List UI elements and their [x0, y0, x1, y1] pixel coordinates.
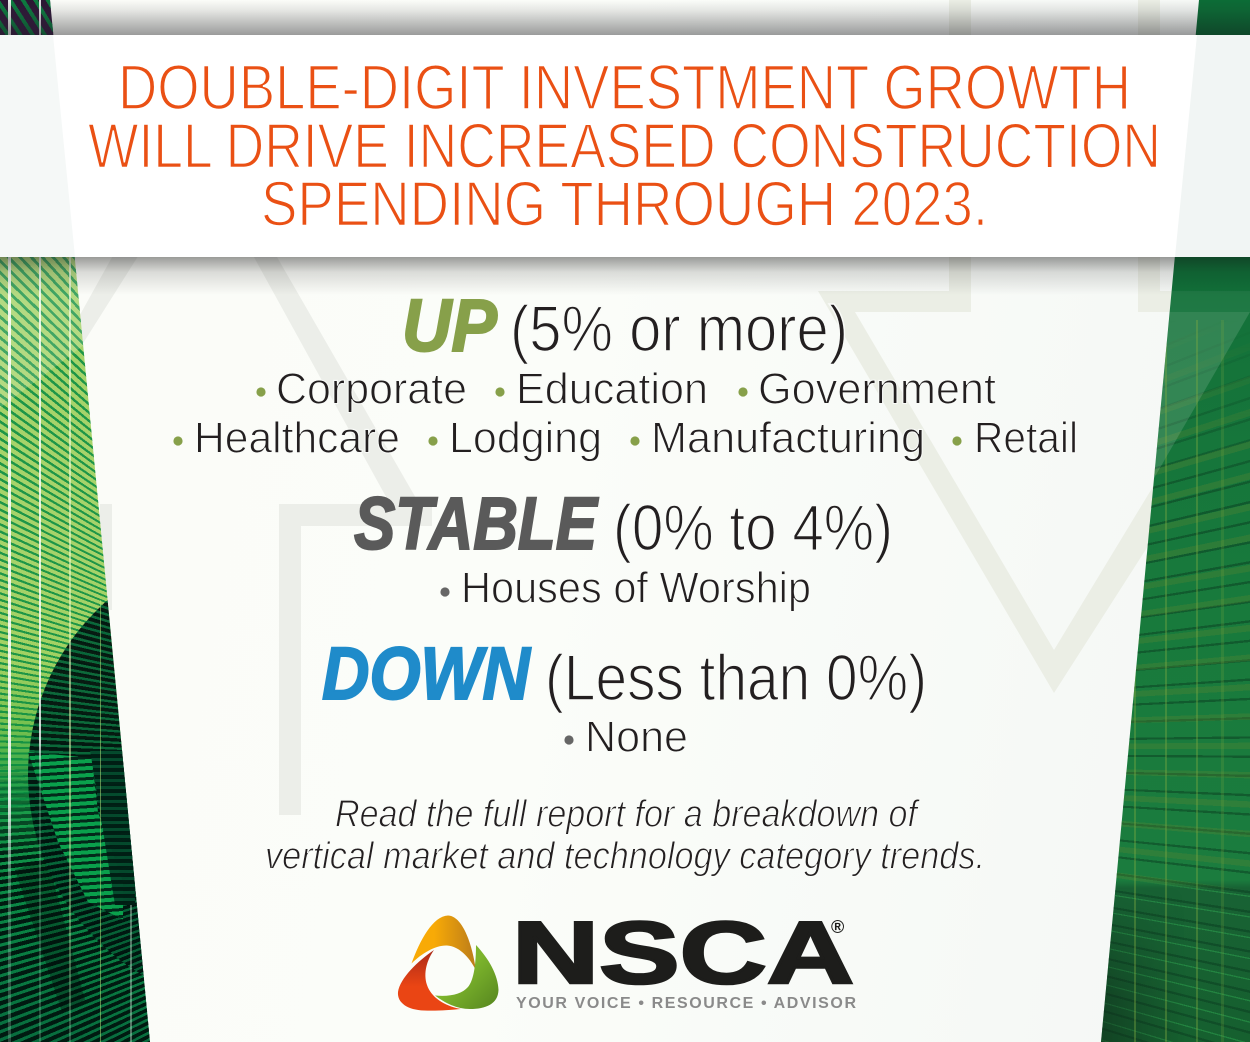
section: STABLE	[354, 482, 893, 565]
stripes: diagonal green fan	[0, 0, 130, 831]
panel: right green fan stripes	[1095, 0, 1250, 1042]
section: STABLE: STABLE	[354, 482, 599, 565]
icon: orange blade	[412, 916, 476, 970]
title: SPENDING THROUGH 2023.	[261, 170, 988, 240]
dark inner block	[90, 750, 135, 905]
note: read the full report: Read the full report for a breakdown of	[335, 794, 920, 836]
list: UP markets line 2: Healthcare	[194, 414, 400, 462]
light triangle overlay	[1154, 312, 1250, 478]
wordmark: NSCA	[512, 903, 854, 1002]
list: UP markets line 1: Corporate	[276, 364, 467, 414]
section: DOWN: (Less than 0%)	[545, 641, 927, 714]
list: UP markets line 1: Government	[758, 364, 996, 414]
icon: green blade	[435, 945, 498, 1009]
section: DOWN: DOWN	[322, 632, 531, 715]
note: read the full report	[265, 794, 985, 878]
panel: left green fan stripes	[0, 0, 160, 1042]
list: UP markets line 2: Lodging	[449, 414, 602, 462]
list: DOWN markets: None	[585, 712, 688, 762]
light triangle overlay	[0, 257, 83, 408]
vertical light lines	[8, 0, 132, 1042]
dark circular arc	[28, 600, 144, 976]
dark band lower left	[15, 864, 85, 1010]
note: read the full report: vertical market and technology category trends.	[265, 836, 985, 878]
logo: NSCA	[398, 903, 856, 1012]
icon: red blade	[398, 950, 461, 1011]
section: UP: (5% or more)	[510, 292, 848, 365]
section: UP: UP	[402, 284, 498, 367]
stripes: light lines at the foot	[1101, 883, 1250, 1042]
list: UP markets line 2: Retail	[974, 414, 1078, 462]
shadow below banner	[0, 257, 1250, 295]
list: STABLE markets: Houses of Worship	[461, 564, 811, 612]
pale band overlay	[1170, 291, 1250, 312]
stripes: olive fan	[1116, 372, 1250, 886]
section: DOWN	[322, 632, 927, 715]
section: STABLE: (0% to 4%)	[613, 491, 893, 564]
tagline: YOUR VOICE • RESOURCE • ADVISOR	[516, 995, 856, 1012]
banner left tint	[0, 35, 75, 257]
shadow above banner	[0, 0, 1250, 35]
banner: title strip	[0, 35, 1250, 257]
dark shade at the foot	[1101, 912, 1171, 1042]
section: UP	[402, 284, 848, 367]
title	[88, 53, 1161, 240]
vertical olive lines	[1134, 320, 1224, 1042]
list: UP markets line 2	[173, 414, 1078, 462]
registered mark: ®	[831, 917, 844, 937]
stripes: dark fan	[1102, 376, 1250, 1042]
list: UP markets line 1	[256, 364, 996, 414]
list: UP markets line 1: Education	[516, 364, 708, 414]
stripes: black lower fan	[0, 766, 150, 1042]
list: UP markets line 2: Manufacturing	[651, 414, 925, 462]
bright inner wedge	[28, 752, 123, 922]
banner right tint	[1175, 35, 1250, 257]
